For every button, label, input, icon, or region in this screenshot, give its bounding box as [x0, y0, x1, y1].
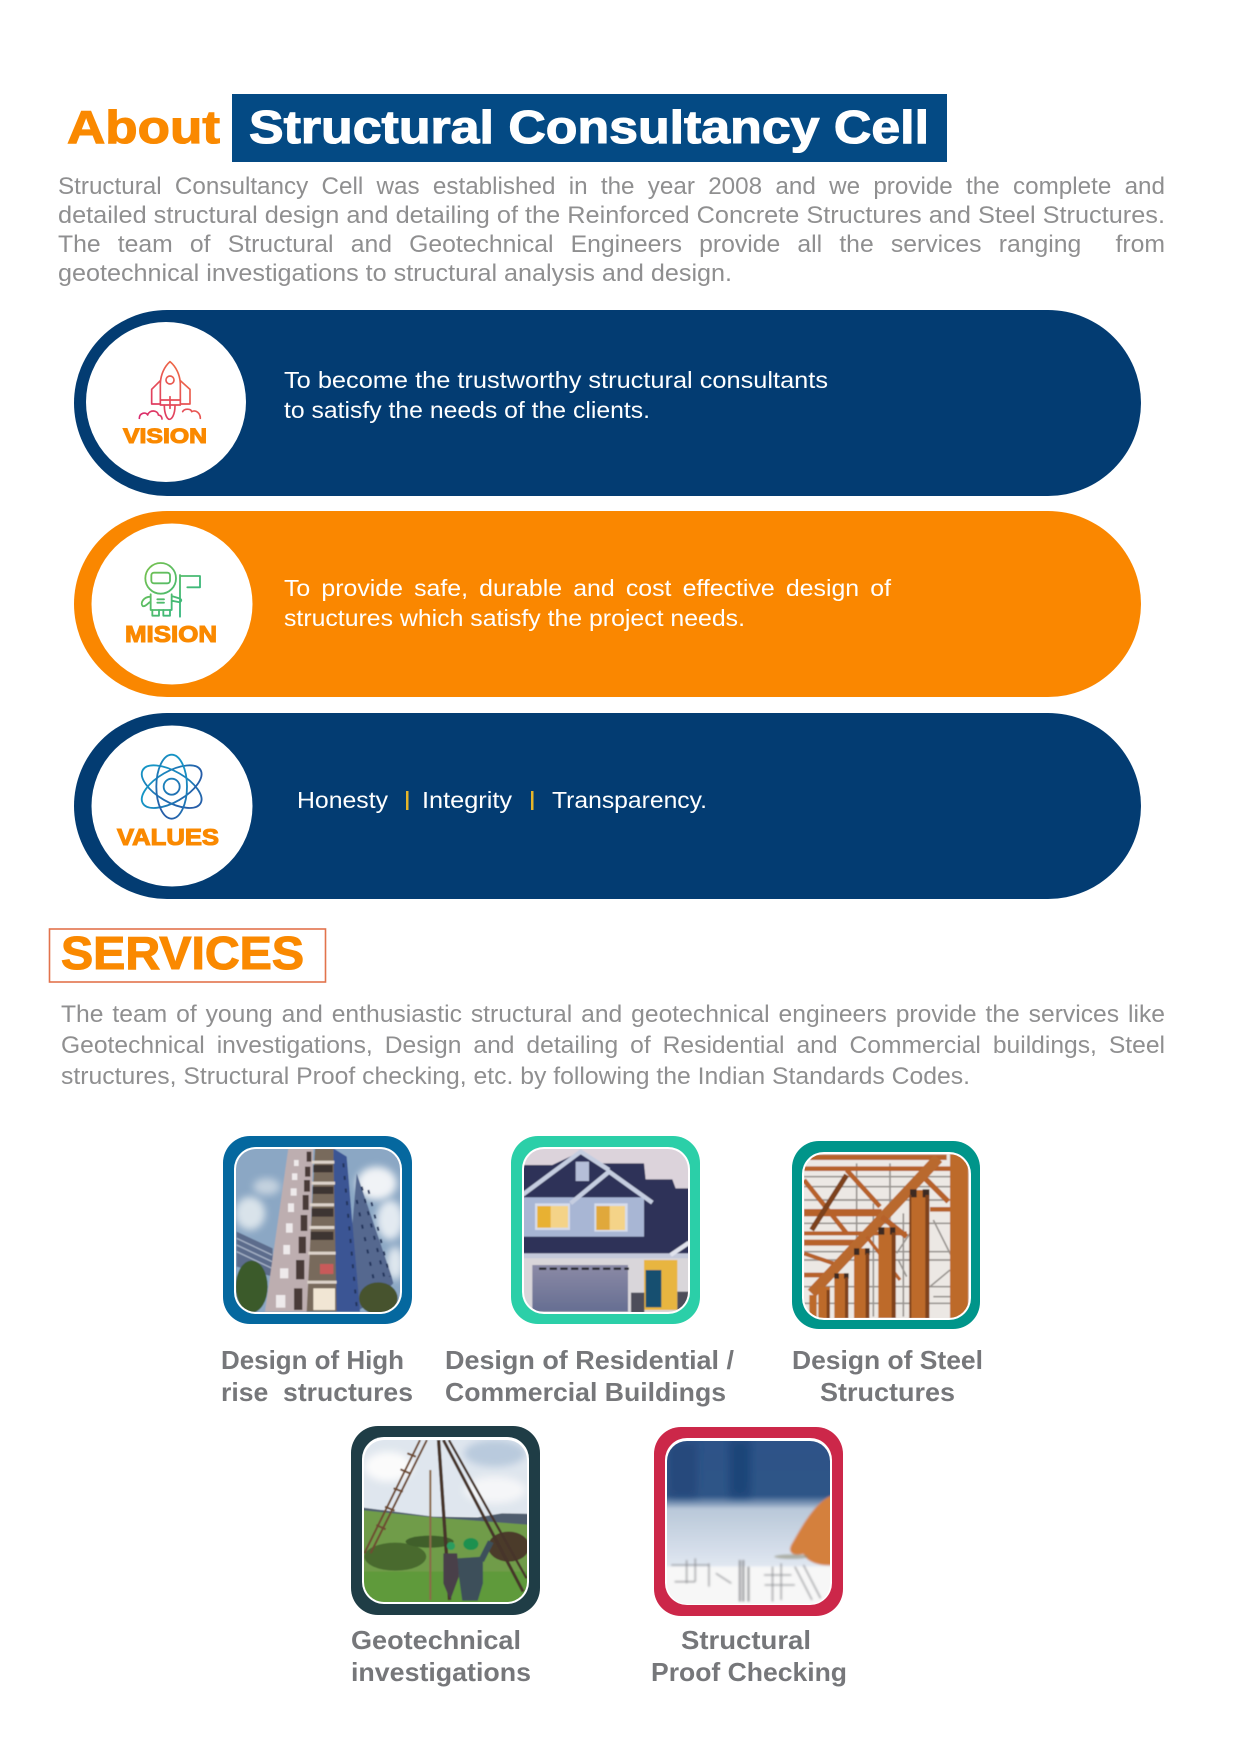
mission statement: structures which satisfy the project needs.: [284, 605, 745, 631]
panel: vision: [74, 310, 1141, 496]
label: steel: Design of Steel: [792, 1345, 983, 1375]
tile: steel structure photo: [792, 1141, 980, 1329]
intro paragraph: The team of Structural and Geotechnical Engineers provide all the services ranging from: [58, 231, 1165, 258]
intro paragraph: geotechnical investigations to structural analysis and design.: [58, 260, 732, 287]
label: proof checking: Proof Checking: [651, 1657, 847, 1687]
values list: Integrity: [422, 787, 512, 813]
vision statement: To become the trustworthy structural consultants: [284, 367, 828, 393]
label: steel: [792, 1345, 983, 1407]
label: geotechnical: investigations: [351, 1657, 531, 1687]
tile: proof checking photo: [654, 1427, 843, 1616]
values list: [297, 787, 707, 813]
heading: services: SERVICES: [61, 927, 304, 979]
intro paragraph: detailed structural design and detailing of the Reinforced Concrete Structures and Steel Structures.: [58, 202, 1165, 229]
mission statement: [284, 575, 891, 631]
values label: VALUES: [117, 824, 219, 850]
label: geotechnical: [351, 1625, 531, 1687]
mission label: MISION: [125, 621, 217, 647]
services paragraph: Geotechnical investigations, Design and detailing of Residential and Commercial buildings, Steel: [61, 1032, 1165, 1059]
label: residential: Commercial Buildings: [445, 1377, 726, 1407]
label: proof checking: [651, 1625, 847, 1687]
services paragraph: structures, Structural Proof checking, etc. by following the Indian Standards Codes.: [61, 1063, 970, 1090]
vision statement: [284, 367, 828, 423]
intro paragraph: [58, 173, 1165, 287]
label: high rise: rise structures: [221, 1377, 413, 1407]
label: high rise: [221, 1345, 413, 1407]
services paragraph: [61, 1001, 1165, 1090]
label: proof checking: Structural: [681, 1625, 811, 1655]
panel: mission: [74, 511, 1141, 697]
icon: rocket: [139, 362, 200, 419]
label: high rise: Design of High: [221, 1345, 404, 1375]
values list: Transparency.: [552, 787, 707, 813]
icon: astronaut with flag: [142, 563, 200, 617]
mission badge circle: [92, 524, 252, 684]
mission statement: To provide safe, durable and cost effective design of: [284, 575, 891, 601]
vision statement: to satisfy the needs of the clients.: [284, 397, 650, 423]
services paragraph: The team of young and enthusiastic structural and geotechnical engineers provide the services like: [61, 1001, 1165, 1028]
tile: geotechnical drilling photo: [351, 1426, 540, 1615]
label: geotechnical: Geotechnical: [351, 1625, 521, 1655]
tile: high rise photo: [223, 1136, 412, 1324]
values badge circle: [92, 726, 252, 886]
label: residential: Design of Residential /: [445, 1345, 734, 1375]
label: residential: [445, 1345, 734, 1407]
icon: atom: [135, 755, 208, 819]
panel: values: [74, 713, 1141, 899]
title banner: Structural Consultancy Cell: [232, 94, 947, 162]
tile: residential house photo: [511, 1136, 700, 1324]
vision badge circle: [86, 322, 246, 482]
values list: Honesty: [297, 787, 388, 813]
title banner: Structural Consultancy Cell: Structural Consultancy Cell: [249, 101, 929, 153]
label: steel: Structures: [820, 1377, 955, 1407]
vision label: VISION: [123, 425, 207, 448]
title: About: About: [67, 101, 220, 153]
intro paragraph: Structural Consultancy Cell was established in the year 2008 and we provide the complete and: [58, 173, 1165, 200]
